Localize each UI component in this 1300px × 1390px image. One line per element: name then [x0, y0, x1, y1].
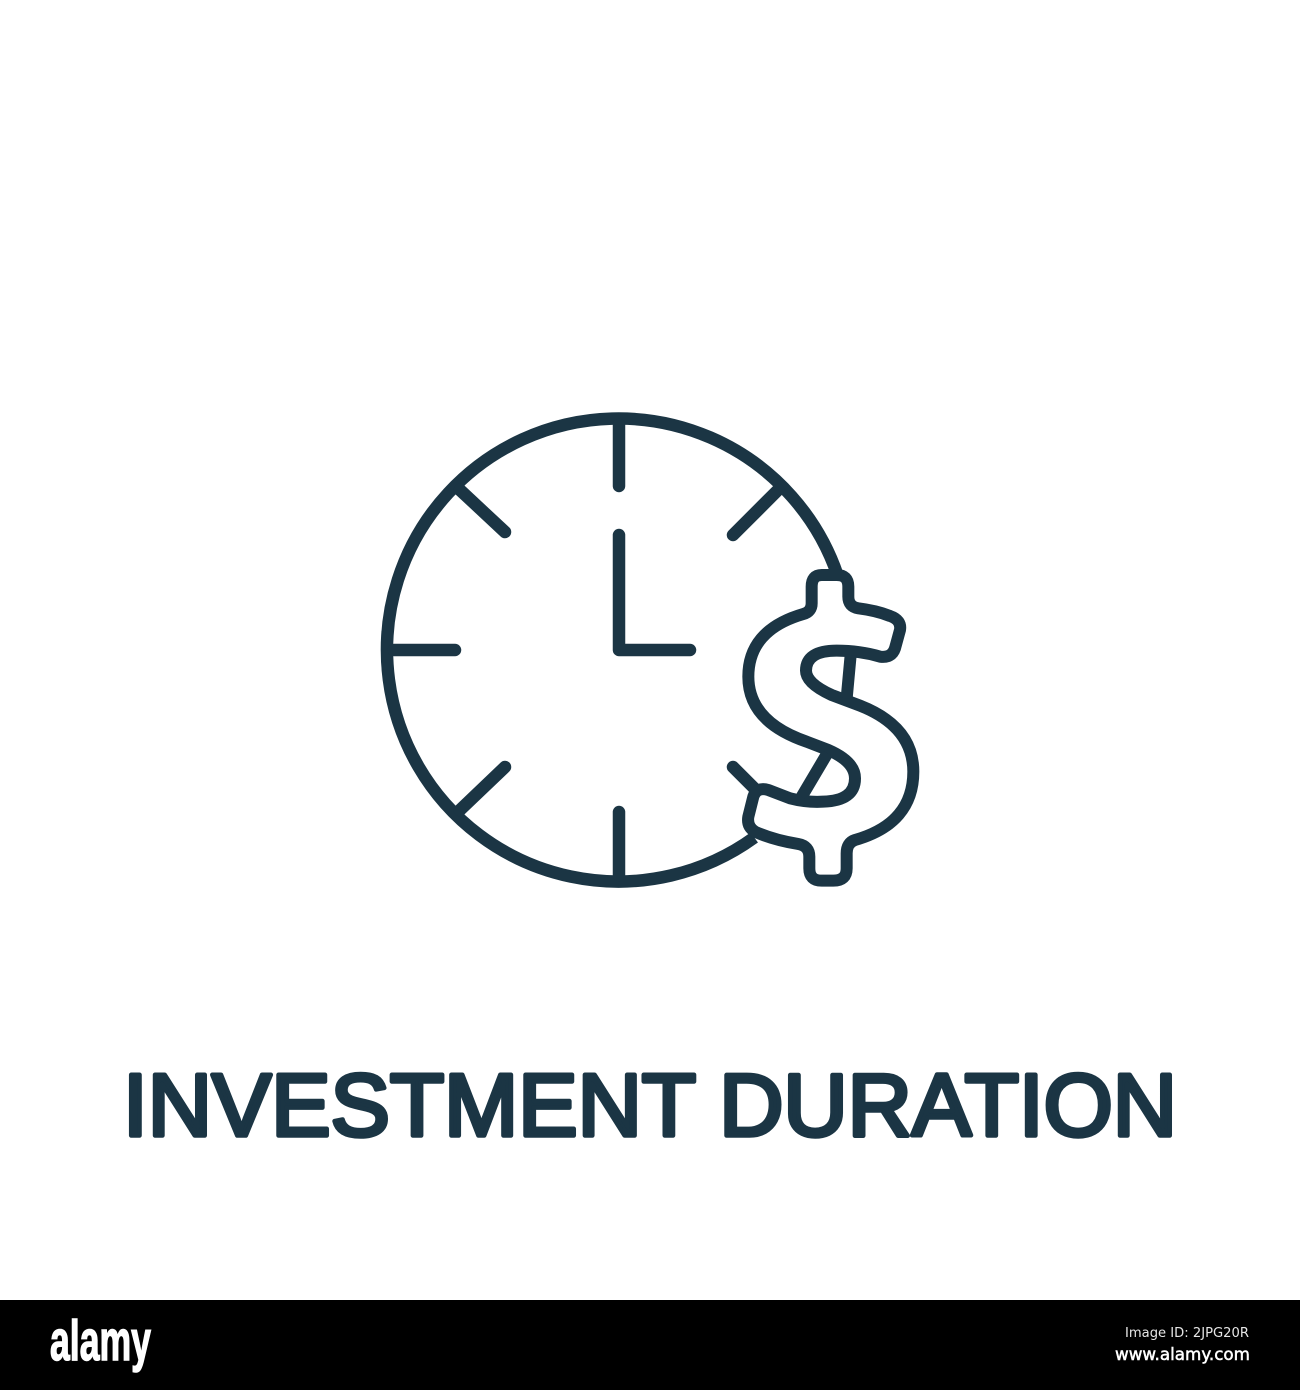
icon: clock with dollar sign — [387, 419, 913, 882]
title: INVESTMENT DURATION — [123, 1056, 1177, 1154]
image id: Image ID: 2JPG20R — [1125, 1326, 1249, 1341]
website: www.alamy.com — [1115, 1345, 1250, 1364]
icon: dollar sign — [748, 575, 913, 881]
footer bar — [0, 1300, 1300, 1390]
clock face circle — [387, 419, 838, 882]
clock hands — [619, 535, 690, 650]
clock hour ticks — [394, 425, 778, 875]
footer logo: alamy — [50, 1309, 151, 1373]
